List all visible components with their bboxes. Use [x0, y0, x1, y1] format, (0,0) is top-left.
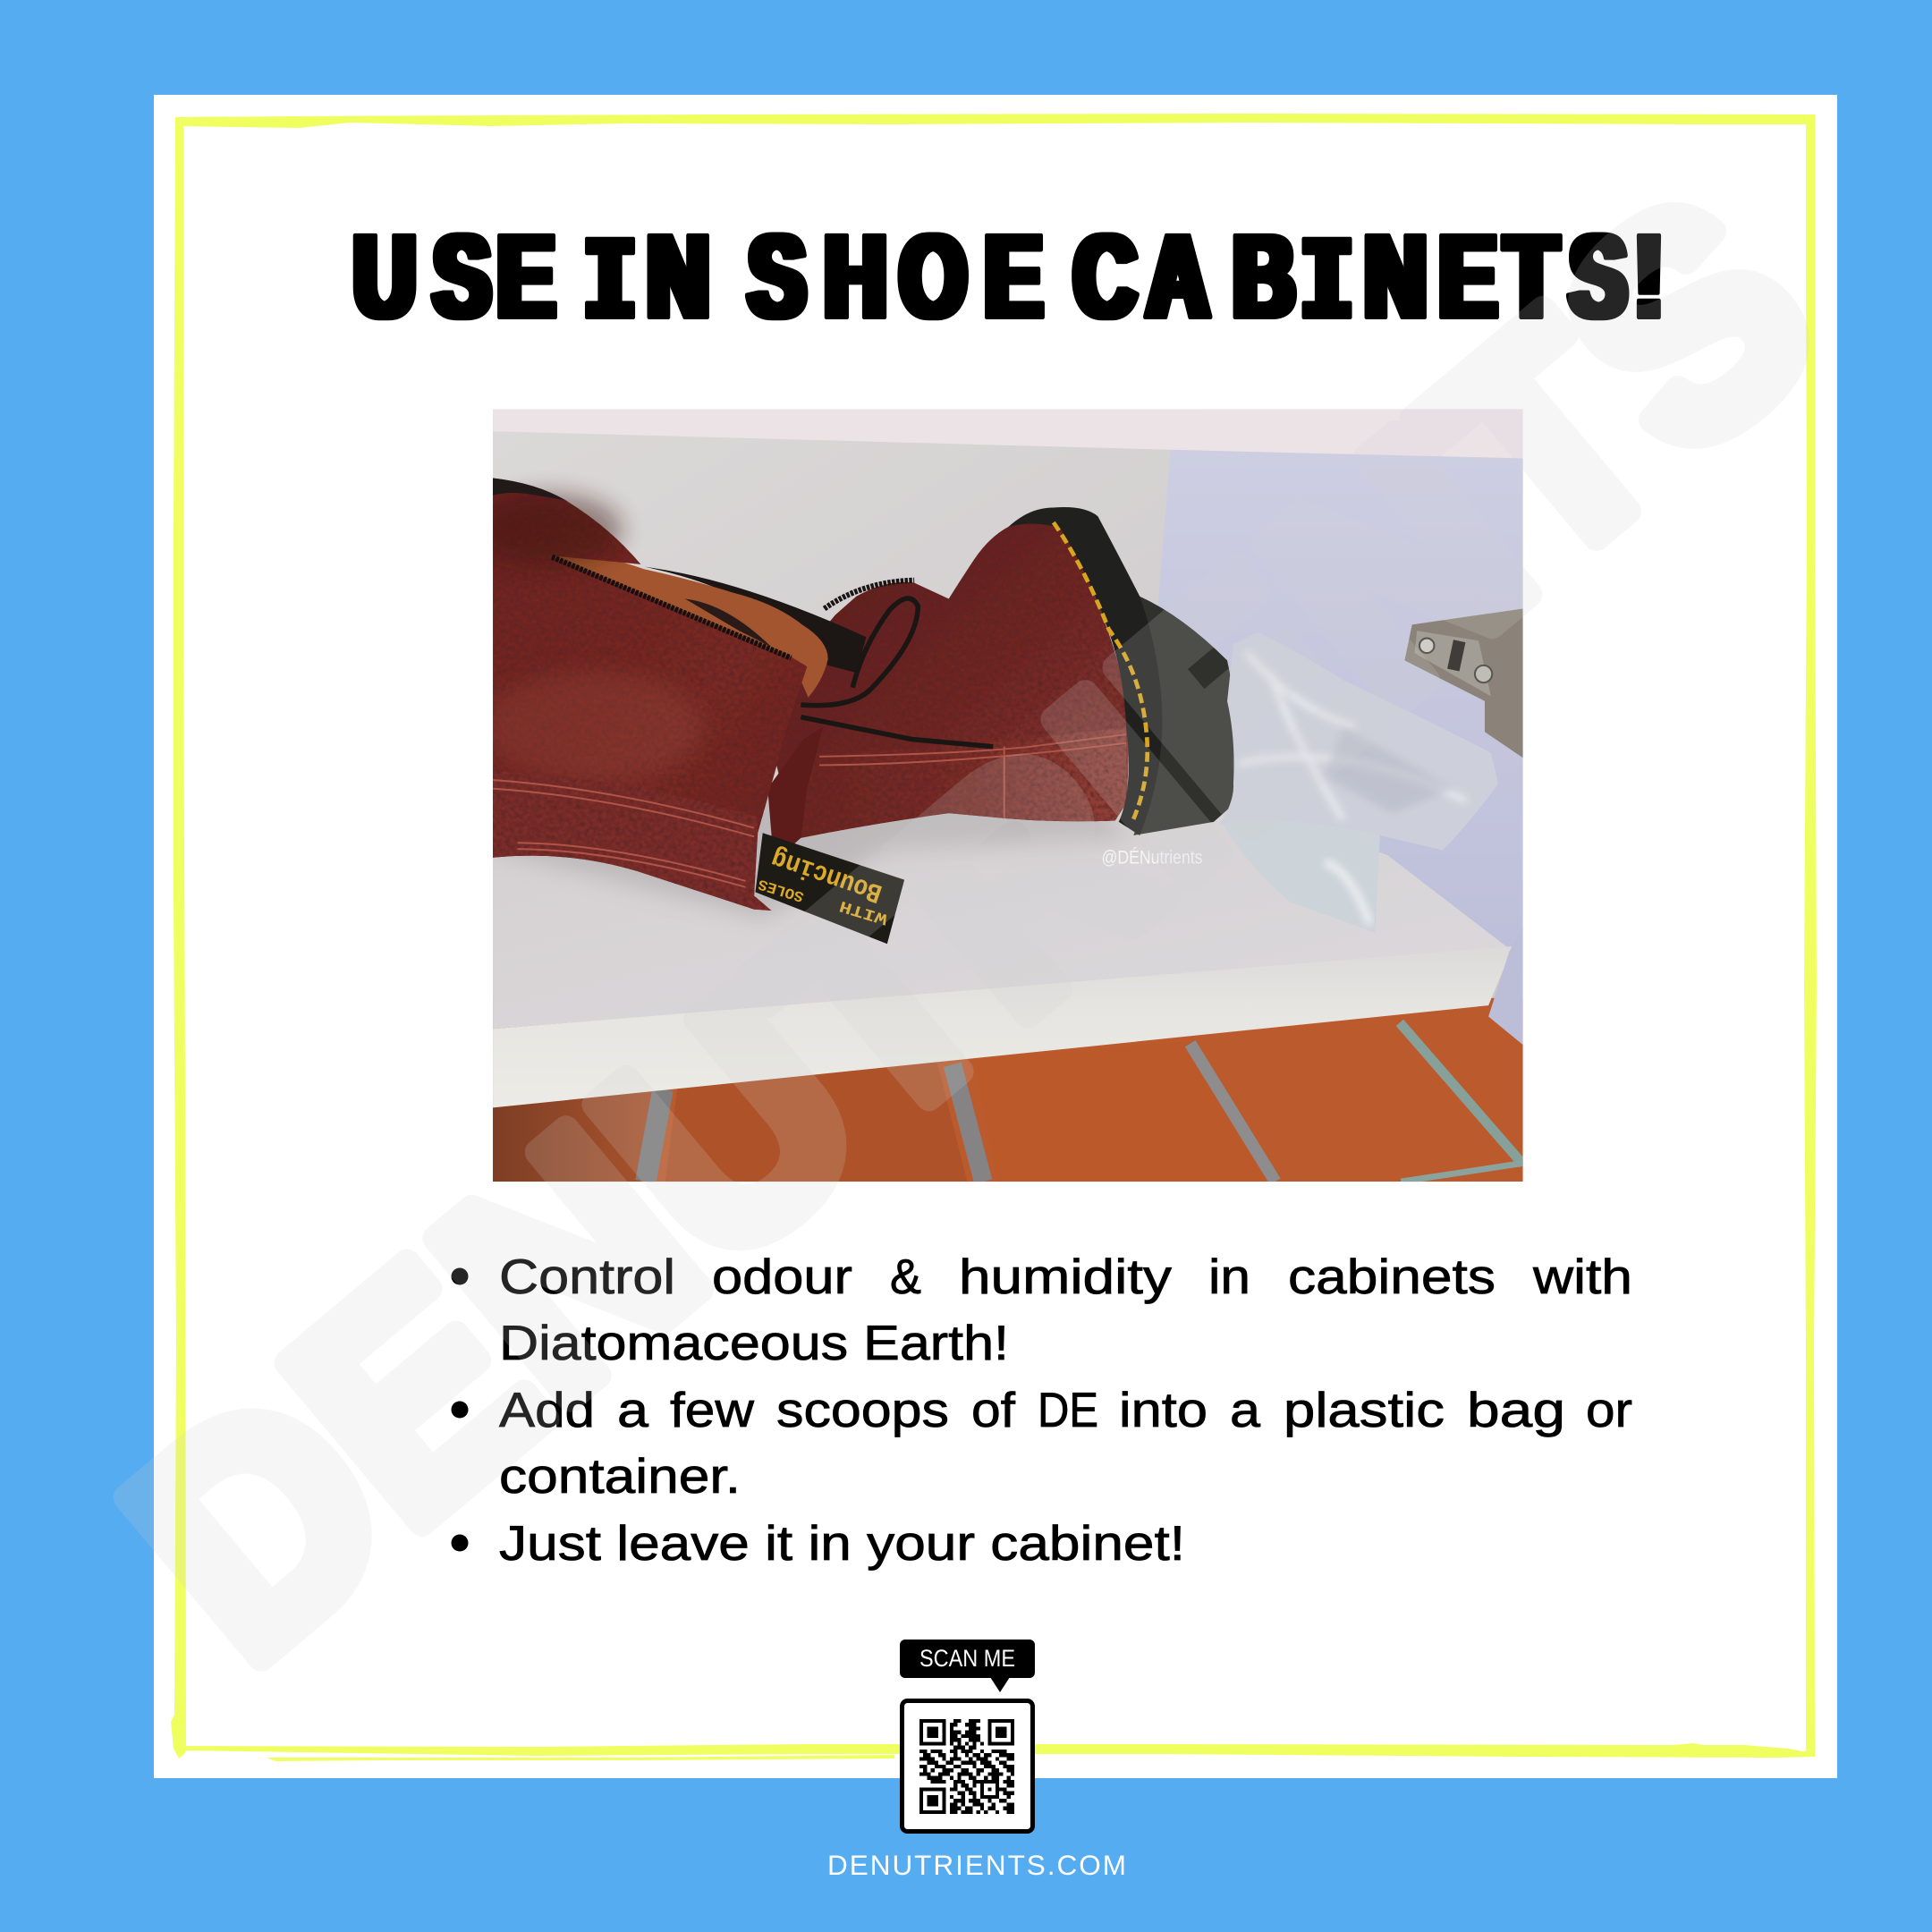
laces: [801, 598, 993, 747]
dark shadow at top of boot: [474, 493, 623, 567]
bullet 2: DE: [1038, 1382, 1098, 1437]
bullet 2: container.: [499, 1448, 741, 1504]
pull tab: WITH: [837, 896, 890, 928]
white panel: [154, 95, 1837, 1778]
yellow stitching: [1054, 522, 1148, 822]
photo handle caption: @DÉNutrients: [1102, 846, 1202, 869]
bullet 3: Just leave it in your cabinet!: [499, 1515, 1185, 1571]
strap between tab and foot: [767, 727, 823, 843]
bullet 2: bag: [1467, 1382, 1565, 1437]
boot leg: [493, 478, 807, 911]
bullet 2: a: [617, 1382, 648, 1437]
pull tab: Bouncing: [768, 842, 886, 908]
right door edge: [1488, 946, 1522, 1045]
bullet 2: into: [1119, 1382, 1208, 1437]
website URL: DENUTRIENTS.COM: [827, 1849, 1126, 1881]
bullet 1: cabinets: [1288, 1249, 1496, 1304]
bullet 2: of: [971, 1382, 1016, 1437]
bullet list: [451, 1249, 1632, 1571]
floor tiles: [493, 998, 1523, 1182]
SCAN ME speech bubble: [900, 1640, 1035, 1692]
back wall of cabinet: [493, 409, 1523, 1025]
bullet 1: odour: [712, 1249, 852, 1304]
soft shadow under boots: [493, 789, 1133, 918]
bullet 1: in: [1208, 1249, 1250, 1304]
boot foot upper: [776, 522, 1128, 839]
bullet 2: [451, 1382, 1632, 1504]
cabinet hinge: [1404, 609, 1523, 758]
title: USE IN SHOE CABINETS!: [354, 211, 1663, 352]
bullet 2: scoops: [776, 1382, 949, 1437]
bullet 1: Diatomaceous Earth!: [499, 1315, 1009, 1370]
photo: boots in a shoe cabinet: [474, 409, 1523, 1182]
sole: [1133, 597, 1237, 835]
bullet 2: few: [670, 1382, 754, 1437]
SCAN ME speech bubble: SCAN ME: [919, 1645, 1015, 1672]
lit leather highlight: [480, 672, 702, 783]
bullet 2: or: [1586, 1382, 1632, 1437]
QR code: [902, 1701, 1032, 1832]
stitch lines: [493, 734, 1126, 887]
shelf front edge: [493, 946, 1513, 1107]
foot lower roll: [795, 727, 1126, 839]
bullet 1: [451, 1249, 1632, 1370]
bullet 1: with: [1532, 1249, 1632, 1304]
foot zip: [825, 580, 914, 609]
pull tab: SOLES: [756, 876, 806, 905]
top lip: [493, 409, 1523, 458]
right wall: [1157, 450, 1523, 973]
hand-drawn yellow frame: [171, 114, 1817, 1761]
bullet 2: plastic: [1284, 1382, 1445, 1437]
black lining: [644, 567, 866, 673]
welt: [1008, 507, 1162, 835]
shelf top: [493, 801, 1509, 1029]
zip: [552, 557, 791, 658]
bullet 2: Add: [499, 1382, 595, 1437]
diagonal watermark: DENUTRIENTS: [70, 132, 1870, 1721]
bullet 1: Control: [499, 1249, 675, 1304]
bullet 1: humidity: [959, 1249, 1173, 1304]
leg lower roll: [493, 771, 771, 911]
bullet 2: a: [1230, 1382, 1260, 1437]
tongue: [552, 551, 828, 698]
pull tab: [755, 833, 904, 944]
top dark band: [493, 478, 565, 500]
bullet 1: &: [890, 1249, 921, 1304]
plastic bag with powder: [1220, 632, 1498, 933]
